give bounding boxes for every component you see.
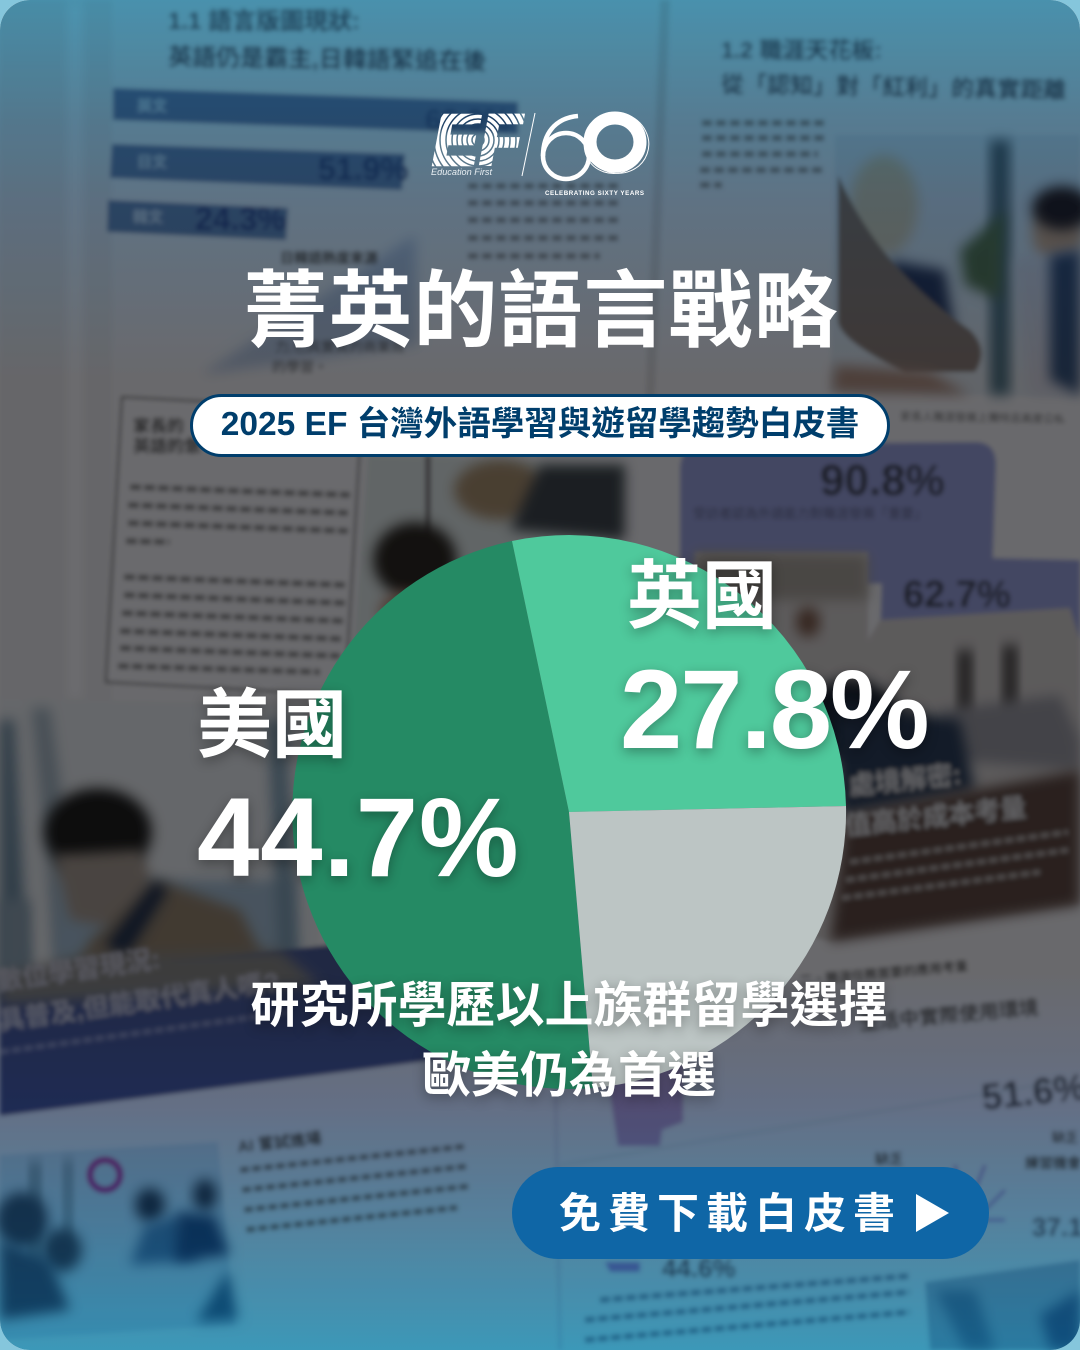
CTA label: 免費下載白皮書	[559, 1190, 902, 1237]
right dark photo: 值高於成本考量	[843, 792, 1028, 841]
bottom left photo	[0, 1142, 238, 1340]
left boxed article: 家長的	[133, 416, 184, 436]
left photo of student	[0, 698, 320, 1000]
blurred whitepaper photo background: 日文	[137, 153, 167, 171]
navy banner	[0, 944, 600, 1116]
right dark photo	[690, 552, 1080, 942]
bottom right article	[555, 958, 1080, 1350]
blurred whitepaper photo background: 69.9%	[425, 104, 510, 137]
left boxed article	[106, 397, 362, 695]
caption text: 歐美仍為首選	[422, 1049, 716, 1103]
bottom left AI article	[237, 1114, 472, 1230]
bottom left AI article: AI 嘗試進場	[237, 1128, 323, 1156]
blurred whitepaper photo background: 24.3%	[195, 201, 286, 237]
bottom right article: 缺乏	[1052, 1130, 1078, 1145]
60 mark	[543, 104, 657, 183]
right cards: 62.7%	[903, 574, 1011, 616]
label: UK: 英國	[627, 554, 777, 638]
value: UK 27.8%: 27.8%	[620, 647, 928, 772]
blurred whitepaper photo background: 家長人職涯發展上獨特且高度公私	[900, 409, 1065, 426]
blurred whitepaper photo background: 的學習。	[272, 359, 328, 375]
centre photo	[350, 455, 625, 720]
label: USA: 美國	[197, 683, 347, 767]
blurred whitepaper photo background: 力,也具實質的商業效	[275, 339, 405, 355]
bottom right article: 練習機會	[1025, 1155, 1080, 1171]
right cards: 90.8%	[820, 456, 945, 505]
divider slash	[522, 113, 535, 176]
bottom right article: 缺乏	[875, 1151, 903, 1167]
bottom right article: 二、職涯任務首要的應用考量	[799, 958, 969, 988]
blurred whitepaper photo background: 51.9%	[318, 151, 409, 187]
right cards: 受訪者認為外語能力對職涯發展「重要」	[693, 506, 927, 521]
caption text: 研究所學歷以上族群留學選擇	[250, 979, 888, 1033]
blurred whitepaper photo background: 韓文	[133, 208, 163, 226]
pie slice: USA 44.7%	[292, 541, 593, 1089]
blurred whitepaper photo background: 日韓語熱度來源	[280, 250, 378, 266]
blurred whitepaper photo background: 1.1 語言版圖現狀:	[168, 8, 360, 35]
subtitle pill	[190, 394, 890, 457]
right dark photo: 處境解密:	[847, 759, 963, 801]
pie slice: UK 27.8%	[512, 535, 846, 812]
blurred whitepaper photo background: 英語仍是霸主,日韓語緊追在後	[168, 44, 487, 75]
icon: play arrow	[916, 1194, 949, 1232]
logo: EF 60	[431, 112, 650, 197]
blurred whitepaper photo background: 英文	[137, 97, 167, 115]
left boxed article: 英語的急	[133, 436, 201, 456]
Education First tagline: Education First	[431, 167, 492, 177]
subtitle pill: 2025 EF 台灣外語學習與遊留學趨勢白皮書	[221, 406, 859, 443]
title: 菁英的語言戰略	[243, 264, 838, 358]
right cards	[680, 442, 1080, 640]
blurred whitepaper photo background: 1.2 職涯天花板:	[721, 37, 882, 63]
caption text	[250, 979, 888, 1104]
right top photo	[830, 135, 1080, 398]
bottom right article: 44.6%	[662, 1253, 736, 1283]
CTA button	[512, 1167, 989, 1259]
EF wordmark: EF	[432, 101, 524, 181]
blurred whitepaper photo background: 從「認知」對「紅利」的真實距離	[721, 71, 1066, 103]
value: USA 44.7%: 44.7%	[197, 775, 520, 900]
bottom right article: 生活中實際使用環境	[858, 995, 1040, 1035]
navy banner: 具普及,但能取代真人嗎?	[0, 967, 281, 1036]
pie slice: others	[569, 806, 846, 1088]
60th anniversary caption: CELEBRATING SIXTY YEARS	[545, 190, 644, 197]
